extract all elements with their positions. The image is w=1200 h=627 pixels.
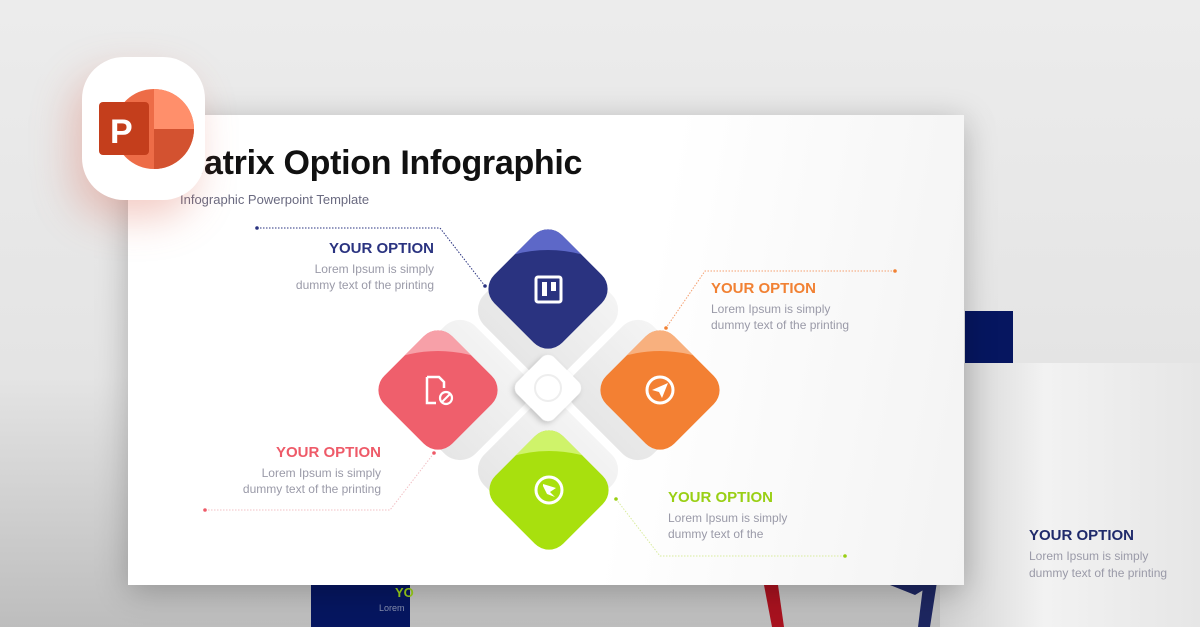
- diamond red: [378, 330, 498, 450]
- diamond orange: [600, 330, 720, 450]
- diamond green: [489, 430, 609, 550]
- title: Matrix Option Infographic: [176, 144, 582, 182]
- gray backing squares: [381, 231, 717, 549]
- main slide: [128, 115, 964, 585]
- back slide text: YOUR OPTION: [1029, 527, 1134, 544]
- option right orange: YOUR OPTION: [711, 280, 816, 297]
- option top-left blue: Lorem Ipsum is simply: [315, 262, 434, 276]
- powerpoint app icon: [82, 57, 205, 200]
- option right orange: Lorem Ipsum is simply: [711, 302, 830, 316]
- option right orange: dummy text of the printing: [711, 318, 849, 332]
- back slide right: [940, 363, 1200, 627]
- back navy block right: [965, 311, 1013, 363]
- option left red: [243, 444, 381, 496]
- back navy block bottom left: Lorem: [379, 603, 405, 613]
- back slide text: Lorem Ipsum is simply: [1029, 549, 1148, 563]
- icon: powerpoint logo: P: [110, 113, 133, 151]
- back slide text: dummy text of the printing: [1029, 566, 1167, 580]
- center diamond: [511, 351, 585, 425]
- option top-left blue: YOUR OPTION: [329, 240, 434, 257]
- icon: powerpoint logo: [99, 89, 194, 169]
- option bottom green: dummy text of the: [668, 527, 763, 541]
- option bottom green: [668, 489, 788, 541]
- option right orange: [711, 280, 849, 332]
- diamond blue: [488, 229, 608, 349]
- back navy block bottom left: [311, 585, 410, 627]
- option left red: Lorem Ipsum is simply: [262, 466, 381, 480]
- back ribbons: [764, 585, 936, 627]
- connector lines: [205, 228, 895, 556]
- option bottom green: Lorem Ipsum is simply: [668, 511, 787, 525]
- back navy block bottom left: YO: [395, 585, 414, 600]
- option top-left blue: [296, 240, 434, 292]
- option left red: dummy text of the printing: [243, 482, 381, 496]
- option bottom green: YOUR OPTION: [668, 489, 773, 506]
- subtitle: Infographic Powerpoint Template: [180, 192, 369, 207]
- option top-left blue: dummy text of the printing: [296, 278, 434, 292]
- back slide text: [1029, 527, 1167, 580]
- option left red: YOUR OPTION: [276, 444, 381, 461]
- diagram: [203, 226, 897, 558]
